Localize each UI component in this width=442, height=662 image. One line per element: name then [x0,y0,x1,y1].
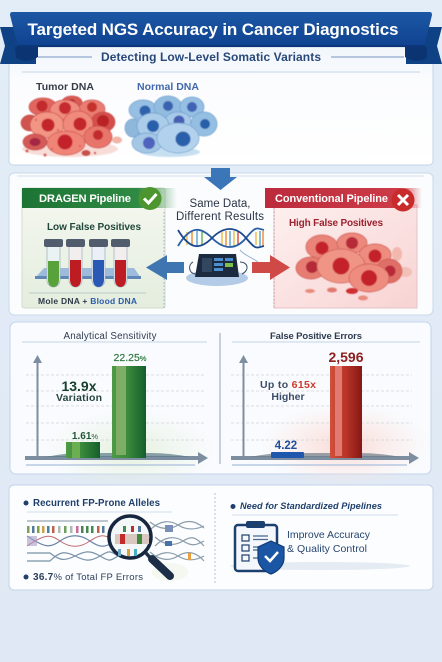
heading: Analytical Sensitivity [64,331,157,342]
divider [219,333,221,464]
callout: up to 615x higher: Up to 615x [260,379,316,391]
bar: 22.25%: 22.25% [114,352,147,364]
bar: 22.25% [112,352,147,458]
bar: 1.61% [66,431,100,458]
bar: 4.22: 4.22 [275,440,297,452]
bar: 2,596 [328,349,364,458]
chart: DNA sequences [27,521,204,561]
chart: false positive errors [231,331,430,487]
text: improve accuracy: Improve Accuracy [287,529,371,541]
heading: False Positive Errors [270,331,362,342]
heading: Recurrent FP-Prone Alleles [33,498,160,509]
left ribbon tail [0,27,36,64]
callout: 13.9x variation: Variation [56,392,102,404]
icon: sequencer device [186,250,258,286]
right ribbon tail [406,27,442,64]
arrow: to conventional [252,255,290,280]
label: high false positives: High False Positives [289,218,383,229]
subtitle: Detecting Low-Level Somatic Variants [101,50,321,64]
heading: Need for Standardized Pipelines [240,501,382,511]
icon: cross [392,188,414,212]
icon: check [138,187,162,210]
arrow: down [204,168,237,190]
icon: magnifier [109,516,188,581]
section: standardized pipelines [230,501,410,574]
panel: DRAGEN pipeline [22,187,177,308]
icon: DNA helix [178,228,264,248]
callout: 13.9x variation [56,378,102,404]
icon: tumor cells [21,96,122,157]
title banner [0,12,442,64]
label: tumor DNA: Tumor DNA [36,81,94,93]
label: normal DNA: Normal DNA [137,81,199,93]
icon: tumor cells [296,233,412,300]
heading: Conventional Pipeline [275,193,388,205]
center text: Same Data, [190,198,250,210]
bar: 2,596: 2,596 [328,349,364,365]
panel: DNA samples [9,47,433,165]
text: improve accuracy: & Quality Control [287,543,367,555]
panel: pipeline comparison [9,173,433,315]
bar: 1.61%: 1.61% [72,431,98,442]
callout: up to 615x higher: Higher [271,391,305,403]
heading: DRAGEN Pipeline [39,193,131,205]
arrow: to DRAGEN [146,255,184,280]
icon: test tubes [35,239,141,287]
label: low false positives: Low False Positives [47,222,141,233]
icon: normal cells [125,96,217,157]
panel: charts [10,322,431,490]
bar: 4.22 [271,440,304,458]
chart: analytical sensitivity [22,331,215,490]
icon: clipboard [235,521,277,571]
panel: takeaways [9,485,433,590]
icon: shield [258,541,284,574]
center text line 2: Different Results [176,211,264,223]
panel: conventional pipeline [265,188,422,308]
title: Targeted NGS Accuracy in Cancer Diagnostics [28,20,398,39]
callout: up to 615x higher [260,379,316,403]
caption: Mole DNA + Blood DNA [38,296,137,306]
text: improve accuracy [287,529,371,555]
stat: 36.7%: 36.7% of Total FP Errors [33,572,143,583]
section: recurrent alleles [24,498,204,583]
callout: 13.9x variation: 13.9x [61,378,97,394]
